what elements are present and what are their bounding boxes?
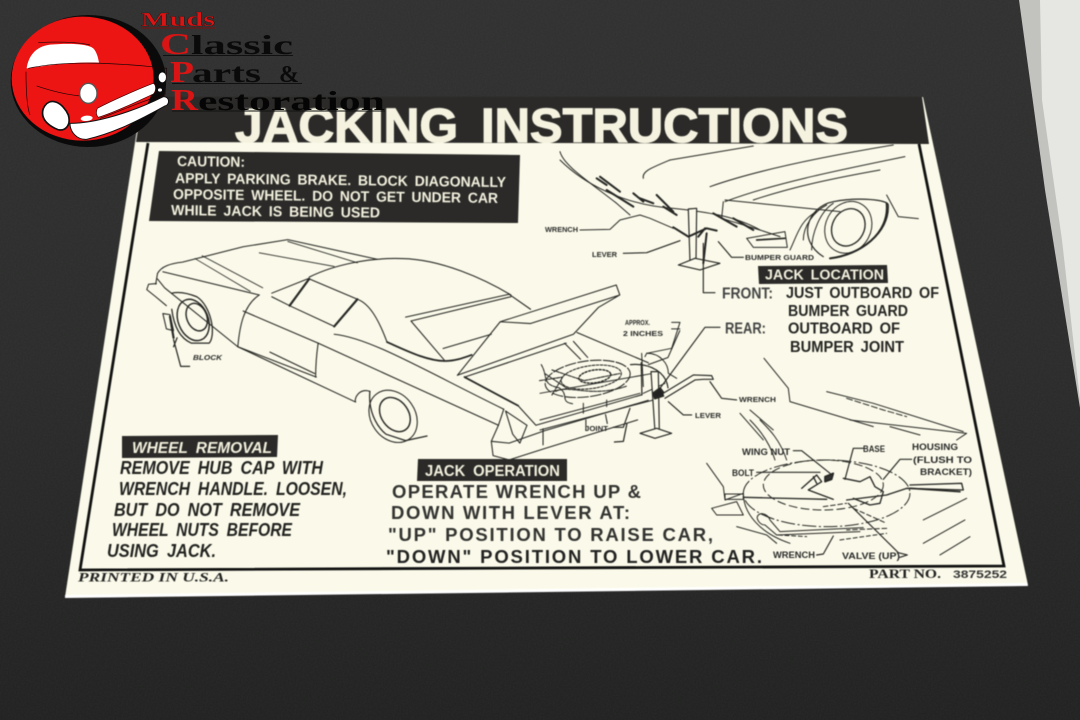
logo wordmark: lassic xyxy=(191,30,293,60)
jack location text: BUMPER GUARD xyxy=(788,303,908,320)
labels: jack diagram callouts: 2 INCHES xyxy=(623,329,663,338)
logo: Muds Classic Parts & Restoration xyxy=(11,9,385,147)
jack location heading: JACK LOCATION xyxy=(765,268,884,284)
wheel removal text: USING JACK. xyxy=(107,541,216,561)
label: block: BLOCK xyxy=(193,353,223,362)
illustration: front of car with jack xyxy=(540,145,963,440)
logo wordmark: Muds xyxy=(141,9,215,31)
illustration: main car with open trunk xyxy=(147,240,680,460)
caution panel: APPLY PARKING BRAKE. BLOCK DIAGONALLY xyxy=(175,171,506,191)
logo wordmark: & xyxy=(279,62,299,88)
rear jack xyxy=(642,353,677,393)
wheel removal text: REMOVE HUB CAP WITH xyxy=(120,458,324,478)
labels: jack diagram callouts: BUMPER GUARD xyxy=(745,253,815,262)
title: INSTRUCTIONS xyxy=(481,100,848,153)
jack operation text: OPERATE WRENCH UP & xyxy=(392,481,641,502)
logo badge: red car in circle xyxy=(11,15,169,147)
part number: PART NO. xyxy=(869,567,941,581)
labels: jack stowage callouts: BOLT xyxy=(732,468,754,478)
front jack xyxy=(688,208,697,262)
jack operation heading: JACK OPERATION xyxy=(425,463,560,480)
illustration: jack stowage detail xyxy=(707,420,970,557)
wheel removal heading xyxy=(122,435,278,458)
panel: decal sheet xyxy=(65,97,1028,598)
wheel removal heading: WHEEL REMOVAL xyxy=(132,440,272,457)
wheel removal text: WHEEL NUTS BEFORE xyxy=(112,520,293,540)
header band xyxy=(136,97,929,144)
jack location text: REAR: xyxy=(725,320,766,338)
wheel removal text xyxy=(107,458,347,561)
jack location text xyxy=(722,285,939,356)
labels: jack stowage callouts xyxy=(732,442,972,561)
jack operation text xyxy=(386,481,762,567)
logo wordmark xyxy=(141,9,385,117)
logo wordmark: C xyxy=(160,26,191,61)
labels: jack diagram callouts xyxy=(545,225,815,433)
labels: jack stowage callouts: WING NUT xyxy=(742,447,791,457)
logo wordmark: P xyxy=(170,54,194,89)
printed in usa: PRINTED IN U.S.A. xyxy=(78,570,229,584)
logo wordmark: arts xyxy=(192,58,261,88)
part number: 3875252 xyxy=(953,569,1007,581)
labels: jack diagram callouts: WRENCH xyxy=(739,395,776,404)
labels: jack diagram callouts: WRENCH xyxy=(545,225,578,234)
logo wordmark: R xyxy=(171,82,199,117)
jack location text: FRONT: xyxy=(722,286,773,302)
jack location text: JUST OUTBOARD OF xyxy=(786,285,939,302)
wheel removal text: WRENCH HANDLE. LOOSEN, xyxy=(119,479,347,499)
part number xyxy=(869,567,1007,581)
labels: jack stowage callouts: BRACKET) xyxy=(920,467,972,477)
labels: jack diagram callouts: LEVER xyxy=(695,411,722,420)
labels: jack stowage callouts: WRENCH xyxy=(773,550,815,560)
title xyxy=(235,100,848,153)
logo wordmark: estoration xyxy=(198,86,385,116)
labels: jack stowage callouts: (FLUSH TO xyxy=(913,455,972,465)
jack operation text: DOWN WITH LEVER AT: xyxy=(391,502,630,523)
jack operation text: "DOWN" POSITION TO LOWER CAR. xyxy=(386,546,762,567)
jack location text: BUMPER JOINT xyxy=(790,339,904,356)
jack location text: OUTBOARD OF xyxy=(788,320,900,338)
background: light wall at top right xyxy=(1019,0,1080,408)
labels: jack stowage callouts: VALVE (UP) xyxy=(842,551,900,561)
wheel removal text: BUT DO NOT REMOVE xyxy=(114,500,301,520)
labels: jack stowage callouts: HOUSING xyxy=(912,442,958,452)
caution panel xyxy=(149,151,520,223)
caution panel: CAUTION: xyxy=(177,154,245,171)
caution panel: WHILE JACK IS BEING USED xyxy=(171,203,380,222)
caution panel: OPPOSITE WHEEL. DO NOT GET UNDER CAR xyxy=(173,187,499,207)
jack operation text: "UP" POSITION TO RAISE CAR, xyxy=(388,524,713,545)
labels: jack stowage callouts: BASE xyxy=(863,444,885,454)
frame border xyxy=(80,143,1004,570)
title: JACKING xyxy=(235,100,458,153)
labels: jack diagram callouts: APPROX. xyxy=(625,318,650,327)
labels: jack diagram callouts: LEVER xyxy=(592,250,618,259)
labels: jack diagram callouts: JOINT xyxy=(585,424,608,433)
